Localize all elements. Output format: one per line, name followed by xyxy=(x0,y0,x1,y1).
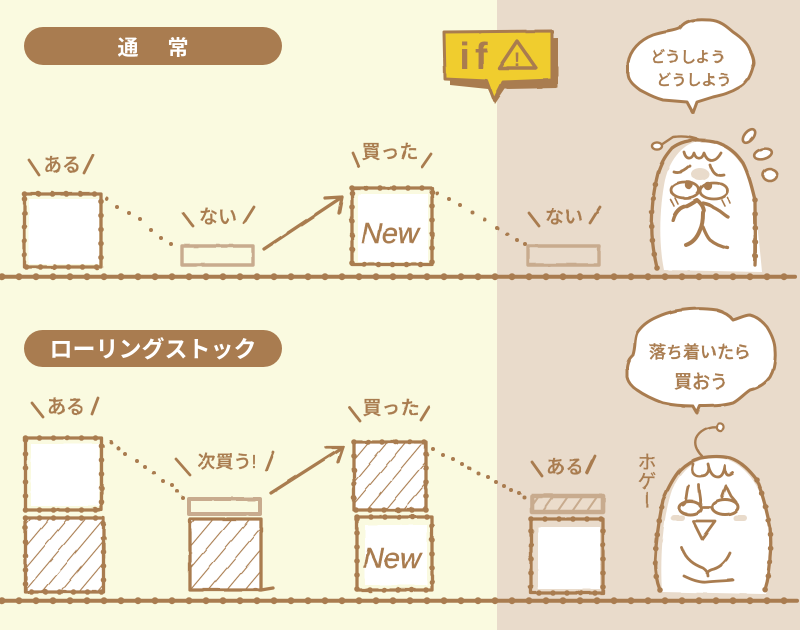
character: panicking xyxy=(652,127,777,272)
dotted line: to empty xyxy=(105,197,173,246)
stock box: full xyxy=(24,194,101,267)
heading: rolling stock: ローリングストック xyxy=(50,336,256,362)
speech bubble: buy once calm xyxy=(627,309,775,413)
label: bought: 買った xyxy=(362,398,420,419)
dotted line: to next xyxy=(109,440,185,500)
empty hatched box xyxy=(532,496,603,512)
label: nai again xyxy=(529,206,600,228)
ground line: top xyxy=(0,275,795,279)
if callout xyxy=(444,31,558,104)
speech bubble: buy once calm: 買おう xyxy=(674,372,728,392)
background: if area xyxy=(497,0,800,630)
stock box: new: New xyxy=(361,218,421,250)
character: calm xyxy=(655,423,771,594)
if callout: ! xyxy=(514,50,520,71)
heading: normal: 通 xyxy=(118,37,138,60)
arrow: buy xyxy=(264,197,342,249)
dotted line: to empty again xyxy=(435,191,527,246)
label: nai: ない xyxy=(199,206,237,228)
hatched box: top xyxy=(354,442,426,510)
label: aru xyxy=(532,456,595,478)
empty box xyxy=(182,246,253,265)
stock box: new xyxy=(352,188,432,264)
label: bought xyxy=(350,398,429,421)
rolling stock: hatched box xyxy=(26,518,104,592)
ground line: bottom xyxy=(0,599,797,603)
caption: hoge: ホゲー xyxy=(634,452,656,509)
hatched box: remaining xyxy=(190,519,273,590)
speech bubble: what to do xyxy=(628,20,754,113)
new box: bottom: New xyxy=(363,543,423,575)
speech bubble: what to do: どうしよう xyxy=(650,49,726,66)
label: nai xyxy=(183,206,254,228)
speech bubble: what to do: どうしよう xyxy=(656,72,732,89)
arrow: buy xyxy=(271,447,343,493)
heading: normal: 常 xyxy=(168,37,188,60)
heading: rolling stock xyxy=(24,330,282,367)
empty box: after running out xyxy=(528,246,599,265)
background: normal area xyxy=(0,0,497,630)
label: buy next xyxy=(176,452,273,475)
rolling stock: full box on top xyxy=(26,438,102,510)
speech bubble: buy once calm: 落ち着いたら xyxy=(649,343,751,362)
label: aru: ある xyxy=(546,457,584,478)
label: nai again: ない xyxy=(545,206,583,228)
label: aru xyxy=(29,155,93,176)
full box on the if side xyxy=(531,519,603,593)
label: bought xyxy=(353,142,431,167)
heading: normal xyxy=(24,27,282,65)
label: aru: ある xyxy=(43,155,81,176)
label: aru: ある xyxy=(47,397,85,418)
dotted line: to partial box xyxy=(431,447,526,499)
label: buy next: 次買う! xyxy=(197,452,257,472)
label: aru xyxy=(32,397,98,418)
empty box: buy next xyxy=(189,499,260,514)
label: bought: 買った xyxy=(361,142,419,163)
if callout: if xyxy=(459,36,493,78)
new box: bottom xyxy=(357,517,432,590)
